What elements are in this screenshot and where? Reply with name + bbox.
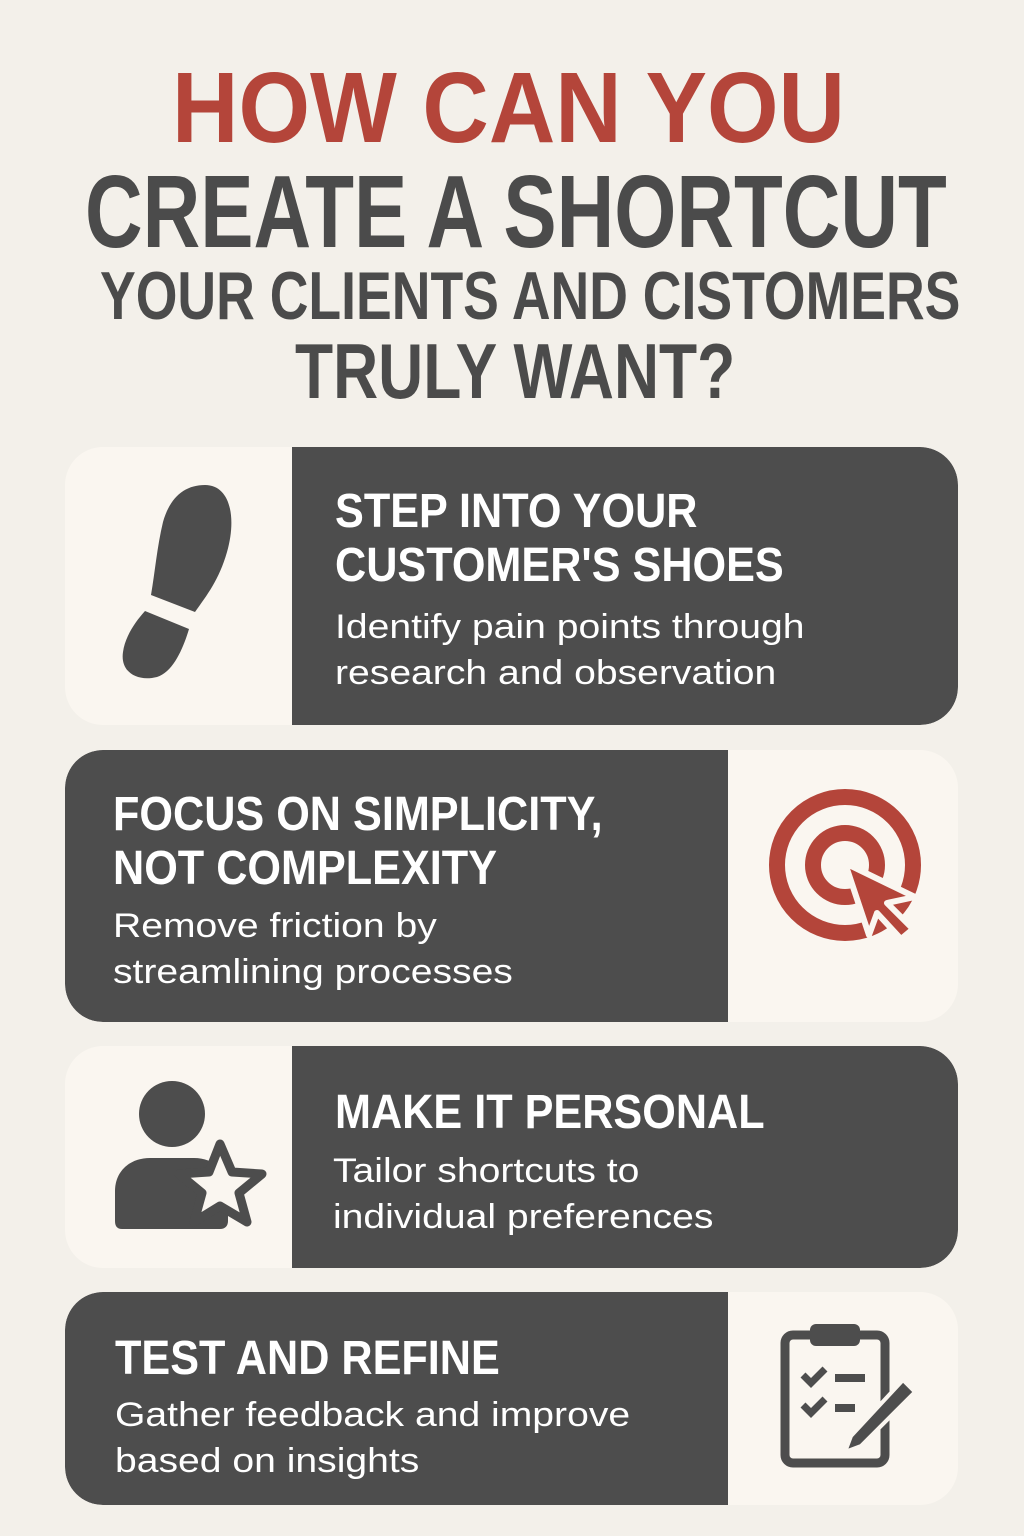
text: based on insights — [115, 1442, 419, 1480]
icon: target — [769, 789, 921, 941]
panel: step 2 — [65, 750, 958, 1022]
heading: TEST AND REFINE — [115, 1332, 500, 1385]
text — [335, 608, 805, 692]
heading: CUSTOMER'S SHOES — [335, 539, 784, 592]
heading: NOT COMPLEXITY — [113, 842, 497, 895]
icon: clipboard — [780, 1324, 912, 1468]
title: TRULY WANT? — [295, 327, 735, 415]
panel: step 3 — [65, 1046, 958, 1268]
icon: person with star — [115, 1081, 266, 1229]
text: streamlining processes — [113, 953, 513, 991]
heading: STEP INTO YOUR — [335, 485, 698, 538]
text — [115, 1396, 630, 1480]
heading — [335, 485, 784, 592]
heading: FOCUS ON SIMPLICITY, — [113, 788, 603, 841]
text: Identify pain points through — [335, 608, 805, 646]
icon: footprint — [122, 485, 232, 678]
title: HOW CAN YOU — [172, 52, 845, 164]
panel: step 4 — [65, 1292, 958, 1505]
text: Tailor shortcuts to — [333, 1152, 639, 1190]
text — [333, 1152, 713, 1236]
title: YOUR CLIENTS AND CISTOMERS — [100, 258, 960, 334]
text — [113, 907, 513, 991]
panel: step 1 — [65, 447, 958, 725]
text: individual preferences — [333, 1198, 713, 1236]
heading — [113, 788, 603, 895]
heading: MAKE IT PERSONAL — [335, 1086, 765, 1139]
text: Remove friction by — [113, 907, 437, 945]
text: research and observation — [335, 654, 776, 692]
text: Gather feedback and improve — [115, 1396, 630, 1434]
title — [85, 52, 960, 415]
title: CREATE A SHORTCUT — [85, 154, 947, 269]
